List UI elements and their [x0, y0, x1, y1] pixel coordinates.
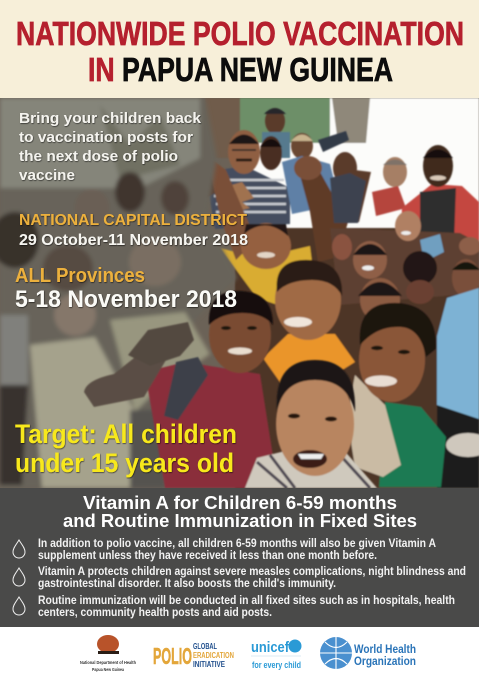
panel heading [63, 493, 417, 531]
logo: national department of health [80, 635, 136, 672]
message: bring children back: vaccine [19, 168, 75, 184]
dates: all provinces [15, 265, 237, 313]
target callout [15, 419, 237, 478]
icon: water drop 3 [13, 597, 25, 615]
logo: national department of health: National Department of Health [80, 660, 136, 665]
bullet text 1: supplement unless they have received it less than one month before. [38, 550, 377, 562]
maroon shirt boy [84, 291, 377, 488]
logo: unicef: for every child [252, 660, 301, 671]
crowd mid kids [333, 152, 357, 184]
message: bring children back [19, 111, 202, 184]
logo: world health organization: World Health [354, 644, 416, 656]
icon: water drop 1 [13, 540, 25, 558]
dates: national capital district: 29 October-11 November 2018 [19, 232, 248, 249]
man with cap [264, 113, 286, 133]
photo: crowd of children [0, 98, 479, 488]
blue shirt child [437, 288, 479, 420]
message: bring children back: the next dose of polio [19, 149, 178, 165]
left faded crowd [0, 98, 237, 488]
sky and trees [205, 98, 479, 248]
logo: polio global eradication initiative: INITIATIVE [193, 660, 226, 669]
orange shirt young man [263, 332, 356, 384]
header banner [0, 0, 479, 98]
logo: polio global eradication initiative: ERADICATION [193, 651, 234, 660]
logo: unicef [251, 639, 302, 671]
yellow shirt child [220, 246, 315, 308]
panel: vitamin A and routine immunization [0, 488, 479, 627]
logo: polio global eradication initiative: POLIO [153, 643, 192, 669]
message: bring children back: Bring your children back [19, 111, 202, 127]
bullet text 1 [38, 538, 436, 562]
bullet text 3: centers, community health posts and aid posts. [38, 607, 272, 619]
dates: all provinces: ALL Provinces [15, 265, 145, 287]
dates: national capital district: NATIONAL CAPITAL DISTRICT [19, 212, 247, 229]
man in red jacket [400, 184, 479, 241]
logo: national department of health: Papua New Guinea [92, 667, 124, 672]
target callout: Target: All children [15, 419, 237, 449]
dates: national capital district [19, 212, 248, 249]
raised arms and fists [298, 168, 348, 262]
panel heading: and Routine Immunization in Fixed Sites [63, 511, 417, 531]
bullet text 2: gastrointestinal disorder. It also boosts the child's immunity. [38, 578, 336, 590]
logo: unicef: unicef [251, 639, 290, 656]
logo: world health organization [320, 637, 416, 669]
footer logos [0, 627, 479, 677]
logo: world health organization: Organization [354, 656, 416, 668]
small children heads [330, 228, 479, 305]
bullet text 3 [38, 595, 455, 619]
green shirt child [379, 402, 446, 487]
title line 2: IN PAPUA NEW GUINEA [88, 51, 393, 88]
target callout: under 15 years old [15, 448, 234, 478]
dates: all provinces: 5-18 November 2018 [15, 286, 237, 313]
icon: water drop 2 [13, 568, 25, 586]
right side crowd [184, 108, 479, 488]
bullet text 1: In addition to polio vaccine, all children 6-59 months will also be given Vitamin A [38, 538, 436, 550]
man with glasses and striped shirt [205, 166, 290, 229]
bullet text 2 [38, 566, 466, 590]
logo: polio global eradication initiative: GLOBAL [193, 642, 217, 651]
front boy [245, 448, 377, 488]
panel heading: Vitamin A for Children 6-59 months [83, 493, 397, 513]
message: bring children back: to vaccination posts for [19, 130, 193, 146]
